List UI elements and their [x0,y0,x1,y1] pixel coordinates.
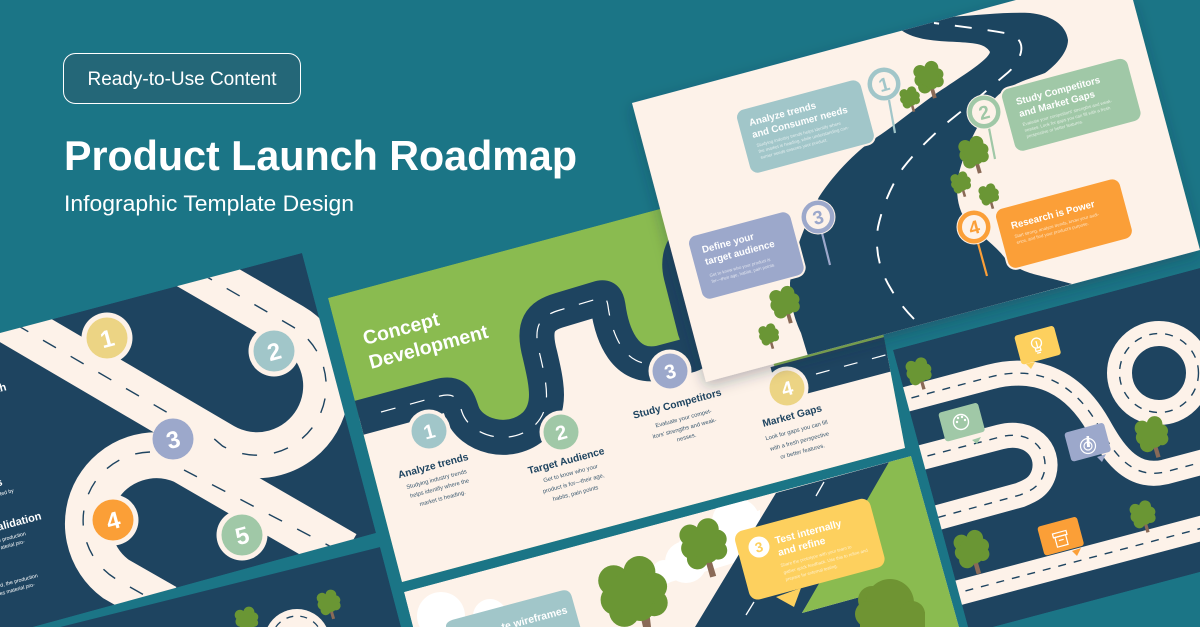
card: study competitors: Study Competitors [1015,75,1101,108]
panel: left S-curve road slide [0,215,376,627]
tag pill [64,54,300,104]
card: define audience: target audience [704,239,777,268]
card: define audience: Define your [701,231,755,256]
road [340,240,698,437]
road arc [268,609,326,627]
step 2 badge: 2 [264,338,284,367]
step 2 text: Target Audience [527,446,606,477]
step 3 text: itors' strengths and weak- [652,418,717,440]
step 2 [527,410,606,503]
subtitle: Infographic Template Design [64,191,354,216]
road: lower U-turn [88,455,345,607]
step 1 text: Analyze trends [397,452,470,481]
road right section [775,351,900,384]
pin 1: 1 [877,74,893,97]
step 4 text: with a fresh perspective [769,431,830,453]
road: upper U-turn [0,215,326,455]
pin 1 [868,68,900,133]
card: analyze trends: Analyze trends [748,100,817,129]
card: analyze trends: Studying industry trends helps identify where [756,120,842,148]
road [790,13,1072,356]
road: hairpin [912,435,1045,521]
road marking [276,616,318,627]
callout text: gather quick feedback. Use this to refine and [783,548,869,575]
icon bubble: palette [938,402,985,444]
road dashes [746,482,824,615]
step 1 [397,410,470,508]
panel: bottom-centre prototype slide [404,456,959,627]
step 1: 1 [421,420,438,445]
icon bubble: box [1037,516,1084,556]
step 4 badge: 4 [103,507,124,536]
road markings [20,278,330,595]
trees [756,59,1003,351]
step 4 badge [92,496,138,546]
callout text: and refine [777,536,827,559]
number badge [748,536,770,558]
title: Product Launch Roadmap [64,132,577,179]
panel: right road-with-icons slide [893,268,1200,627]
card: analyze trends: the market is heading, while understanding con- [758,125,850,154]
pin 4 [956,210,992,276]
road: loop [1120,334,1198,412]
card: define audience [686,209,807,302]
step 1 badge [82,312,132,364]
step 2: 2 [553,421,570,446]
step 3 text: Study Competitors [632,387,723,422]
callout text: prepare for external testing. [785,563,838,582]
card: analyze trends [734,77,877,176]
step 3 text: Evaluate your compet- [655,409,713,429]
step 4 [761,366,830,461]
pin 3: 3 [811,207,826,230]
tag pill: Ready-to-Use Content [87,69,277,90]
callout text: Test internally [774,519,843,547]
card: study competitors [999,56,1144,154]
cream lower area [340,298,930,600]
step 4: 4 [779,377,796,402]
pin 3 [800,200,836,265]
large tree [855,579,925,627]
card: research is power: ence, and find your product's purpose. [1016,221,1089,245]
step 4 text: or better features. [780,443,826,461]
green field [802,456,959,627]
road centre dashes [877,23,1021,340]
step 3 badge: 3 [163,426,183,455]
step 2 text: product is for—their age, [542,473,606,495]
card: define audience: Get to know who your product is [709,257,772,278]
step 2 badge [248,330,297,376]
step 1 text: market is heading. [419,490,467,508]
tree [316,590,341,620]
card: analyze trends: sumer needs ensures your product. [760,137,828,160]
pin 4: 4 [967,217,983,240]
step 1 text: helps identify where the [410,478,470,500]
road [695,461,893,627]
heading: Concept [361,308,442,350]
step 2 text: habits, pain points [552,485,599,503]
number badge: 3 [753,538,765,556]
step 2 text: Get to know who your [543,464,599,484]
callout text [774,519,869,582]
card: research is power: Research is Power [1010,199,1096,232]
step 1 badge: 1 [97,325,117,354]
wireframes card [446,590,580,627]
icon bubble: lightbulb [1014,325,1061,369]
card: study competitors: Evaluate your competitors' strengths and weak- [1022,98,1113,127]
callout: test internally [733,497,887,607]
card: define audience: for—their age, habits, pain points. [711,262,776,284]
step 5 badge [216,510,268,560]
road: lower straight [950,526,1200,595]
step 4 text: Market Gaps [761,403,824,430]
panel: winding road slide [632,0,1200,382]
step 4 text [761,403,830,461]
panel: bottom-left road slide fragment [60,547,401,627]
panel: concept development slide [328,209,905,582]
road dashes [381,298,660,437]
step 3 [632,350,723,444]
clipped left-edge labels [0,381,43,598]
road markings [896,334,1200,595]
card: research is power [993,176,1135,271]
step 3 text: nesses. [676,432,698,444]
card: study competitors: and Market Gaps [1018,89,1096,120]
tree [679,518,728,578]
clouds [417,498,760,627]
card: study competitors: perspective or better features. [1026,119,1084,139]
trees [903,355,1174,578]
clipped left-edge labels: aterial pro- [0,539,26,551]
step 2 text [527,446,606,503]
step 5 badge: 5 [232,522,252,551]
road dashes right [816,351,900,374]
heading: Development [367,321,491,374]
tree: cropped at frame [598,556,668,627]
card: research is power: Start strong, analyze trends, know your audi- [1014,211,1100,239]
card: study competitors: nesses. Look for gaps you can fill with a fresh [1024,105,1111,133]
callout text: Share the prototype with your team to [780,544,853,568]
step 1 text: Studying industry trends [406,469,468,491]
step 3 badge [152,418,194,460]
card: analyze trends: and Consumer needs [751,105,849,141]
step 3: 3 [662,360,679,385]
step 4 text: Look for gaps you can fill [765,420,828,442]
pin 2: 2 [977,102,992,125]
road: S-curve [896,373,1200,473]
tree: cropped at frame [235,607,258,627]
step 3 text [632,387,723,444]
step 1 text [397,452,470,508]
icon bubble: target [1064,422,1111,462]
pin 2 [966,94,1002,159]
road surface and contents [790,13,1072,356]
